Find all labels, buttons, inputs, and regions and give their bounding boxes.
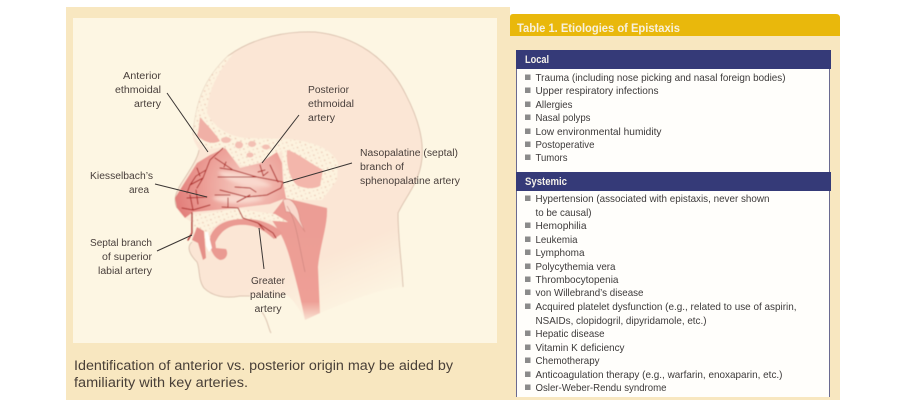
label: septal branch of superior labial artery [90, 238, 153, 277]
section header: Local: Local [525, 54, 549, 66]
list: systemic causes: von Willebrand’s disease [536, 287, 644, 299]
list: systemic causes: Leukemia [536, 234, 578, 246]
illustration: head cross-section [175, 32, 422, 333]
leader: anterior ethmoidal [167, 93, 208, 152]
label: nasopalatine branch: sphenopalatine artery [360, 176, 460, 187]
label: septal branch of superior labial artery: of superior [102, 252, 153, 263]
caption [74, 358, 453, 390]
table title bar [510, 14, 840, 36]
list: local causes: Upper respiratory infections [536, 85, 658, 97]
list: systemic causes [525, 193, 796, 394]
list: systemic causes: Polycythemia vera [536, 261, 616, 273]
label: nasopalatine branch: Nasopalatine (septal) [360, 148, 458, 159]
nasal cavity [175, 148, 286, 218]
list: local causes: Postoperative [536, 139, 595, 151]
hard palate bone [191, 209, 288, 244]
list: systemic causes: Thrombocytopenia [536, 274, 619, 286]
list: systemic causes: Osler-Weber-Rendu syndrome [536, 382, 667, 394]
list: systemic causes: Lymphoma [536, 247, 585, 259]
section header: Local [516, 50, 831, 69]
list: systemic causes: Vitamin K deficiency [536, 342, 625, 354]
label: greater palatine artery: artery [254, 304, 282, 315]
soft palate and roof of mouth [210, 219, 283, 243]
list: local causes: Tumors [536, 152, 568, 164]
label: anterior ethmoidal artery [115, 71, 162, 110]
label: Kiesselbach's area [90, 171, 153, 196]
head outline [175, 32, 422, 333]
label: Kiesselbach's area: area [129, 185, 149, 196]
list: systemic causes: Hypertension (associated with epistaxis, never shown [536, 193, 770, 205]
panel: illustration area [73, 18, 497, 343]
section header: Systemic: Systemic [525, 176, 567, 188]
list: systemic causes: NSAIDs, clopidogril, dipyridamole, etc.) [536, 315, 706, 327]
label: septal branch of superior labial artery: labial artery [98, 266, 152, 277]
list: systemic causes: Hemophilia [536, 220, 587, 232]
list: systemic causes: Acquired platelet dysfunction (e.g., related to use of aspirin, [536, 301, 796, 313]
list: systemic causes: to be causal) [536, 207, 592, 219]
label: greater palatine artery: palatine [250, 290, 286, 301]
pale turbinates [212, 172, 272, 203]
panel: figure background [66, 7, 510, 400]
list: local causes: Nasal polyps [536, 112, 590, 124]
leader: greater palatine [259, 228, 264, 269]
label: anterior ethmoidal artery: ethmoidal [115, 85, 161, 96]
list: systemic causes: Anticoagulation therapy (e.g., warfarin, enoxaparin, etc.) [536, 369, 782, 381]
leader: septal branch [157, 235, 192, 251]
head silhouette [175, 32, 422, 320]
sphenoid sinus [287, 150, 323, 188]
list: local causes: Low environmental humidity [536, 126, 662, 138]
eustachian fold [283, 199, 305, 232]
leader: nasopalatine [283, 163, 352, 183]
label: posterior ethmoidal artery [308, 85, 354, 124]
label: posterior ethmoidal artery: ethmoidal [308, 99, 354, 110]
arteries [182, 148, 283, 240]
panel: table [510, 14, 840, 400]
list: systemic causes: Chemotherapy [536, 355, 600, 367]
label: anterior ethmoidal artery: artery [134, 99, 161, 110]
label: greater palatine artery: Greater [251, 276, 286, 287]
caption: Identification of anterior vs. posterior origin may be aided by [74, 358, 453, 373]
list: local causes: Allergies [536, 99, 572, 111]
ethmoid air cells [221, 137, 270, 158]
caption: familiarity with key arteries. [74, 375, 248, 390]
table title: Table 1. Etiologies of Epistaxis [517, 23, 680, 35]
table body [516, 51, 830, 397]
label: septal branch of superior labial artery: Septal branch [90, 238, 152, 249]
section header: Systemic [516, 172, 831, 191]
list: local causes [525, 72, 786, 164]
label: posterior ethmoidal artery: Posterior [308, 85, 350, 96]
leader: posterior ethmoidal [262, 115, 299, 163]
label: anterior ethmoidal artery: Anterior [123, 71, 162, 82]
frontal sinus [197, 117, 220, 143]
label: greater palatine artery [250, 276, 286, 315]
label: posterior ethmoidal artery: artery [308, 113, 335, 124]
label: nasopalatine branch [360, 148, 460, 187]
incisor and lip tissue [192, 227, 206, 260]
list: local causes: Trauma (including nose picking and nasal foreign bodies) [536, 72, 786, 84]
table background [510, 36, 840, 400]
list: systemic causes: Hepatic disease [536, 328, 605, 340]
leader: Kiesselbach's area [155, 184, 207, 197]
label: Kiesselbach's area: Kiesselbach’s [90, 171, 153, 182]
skull bone [193, 54, 338, 200]
pharynx [270, 198, 327, 320]
label: nasopalatine branch: branch of [360, 162, 404, 173]
